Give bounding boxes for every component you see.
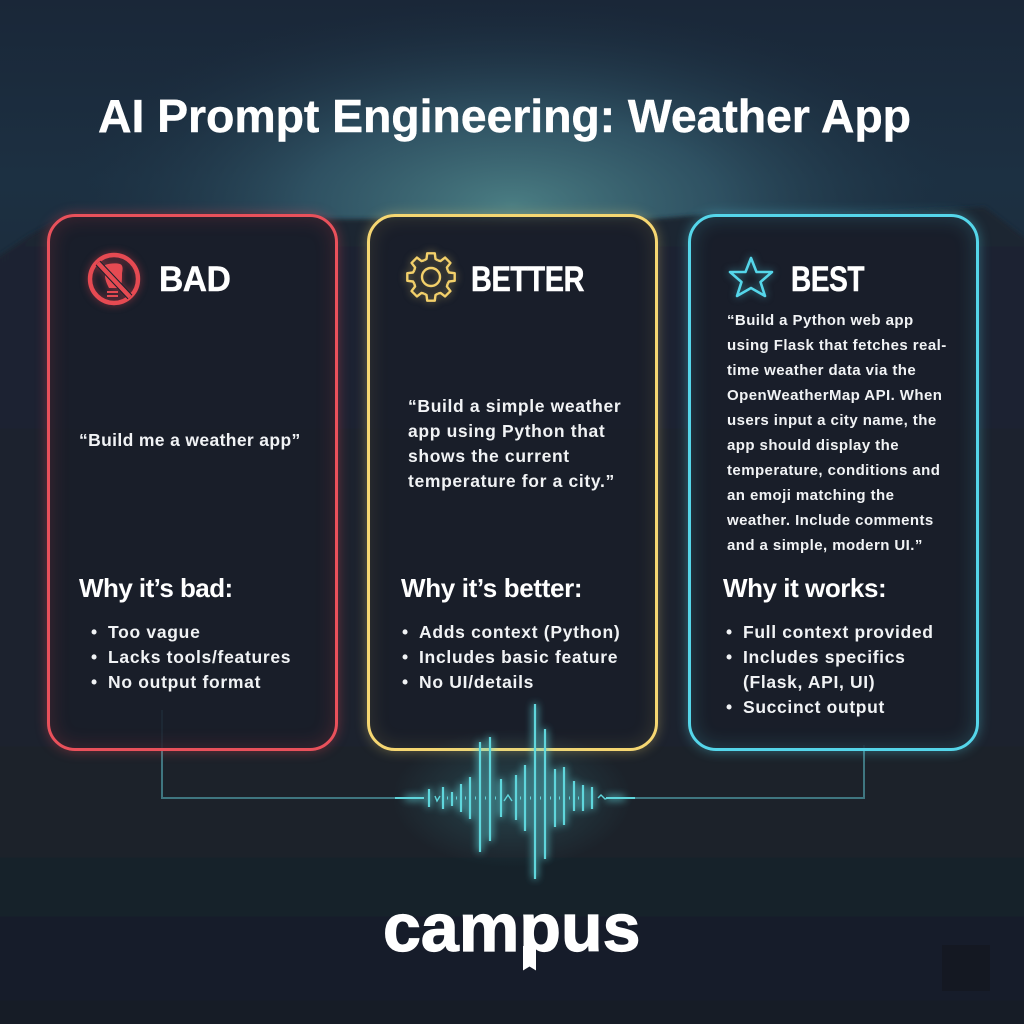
heading: why bad: Why it’s bad: [79,573,233,603]
heading: why better: Why it’s better: [401,573,582,603]
prompt: best: weather. Include comments [727,512,934,529]
prompt: best: OpenWeatherMap API. When [727,387,942,404]
icon: star [726,254,776,300]
prompt: bad: “Build me a weather app” [79,430,301,450]
list: best reasons: Full context provided [743,622,934,642]
list: bad reasons: • [91,622,97,642]
prompt: better: app using Python that [408,421,605,441]
prompt: best: “Build a Python web app [727,312,914,329]
logo: campus: campus [383,890,641,966]
list: best reasons: Includes specifics [743,647,905,667]
panel: better [367,214,658,751]
list: best reasons: • [726,697,732,717]
prompt: better: temperature for a city.” [408,471,615,491]
list: bad reasons: Too vague [108,622,201,642]
heading: BAD: BAD [159,260,230,299]
prompt: best: time weather data via the [727,362,916,379]
title: AI Prompt Engineering: Weather App [98,90,911,142]
icon: gear [402,248,460,306]
list: bad reasons: Lacks tools/features [108,647,291,667]
prompt: better: shows the current [408,446,570,466]
list: better reasons: Adds context (Python) [419,622,620,642]
list: best reasons [726,622,934,717]
prompt: better [408,396,621,491]
prompt: better: “Build a simple weather [408,396,621,416]
list: best reasons: • [726,622,732,642]
list: best reasons: Succinct output [743,697,885,717]
prompt: best [727,312,947,554]
prompt: best: using Flask that fetches real- [727,337,947,354]
panel: best [688,214,979,751]
heading: BEST: BEST [791,260,864,299]
icon: prohibited fist [83,248,145,310]
list: better reasons: • [402,622,408,642]
panel: bad [47,214,338,751]
list: best reasons: (Flask, API, UI) [743,672,875,692]
heading: why best: Why it works: [723,573,886,603]
list: bad reasons: • [91,672,97,692]
prompt: best: an emoji matching the [727,487,894,504]
list: better reasons: Includes basic feature [419,647,618,667]
list: better reasons: No UI/details [419,672,534,692]
list: better reasons: • [402,647,408,667]
list: better reasons: • [402,672,408,692]
heading: BETTER: BETTER [471,260,584,299]
list: bad reasons [91,622,291,692]
prompt: best: app should display the [727,437,899,454]
prompt: best: users input a city name, the [727,412,937,429]
prompt: best: temperature, conditions and [727,462,940,479]
list: bad reasons: No output format [108,672,261,692]
list: better reasons [402,622,620,692]
list: best reasons: • [726,647,732,667]
prompt: best: and a simple, modern UI.” [727,537,923,554]
list: bad reasons: • [91,647,97,667]
